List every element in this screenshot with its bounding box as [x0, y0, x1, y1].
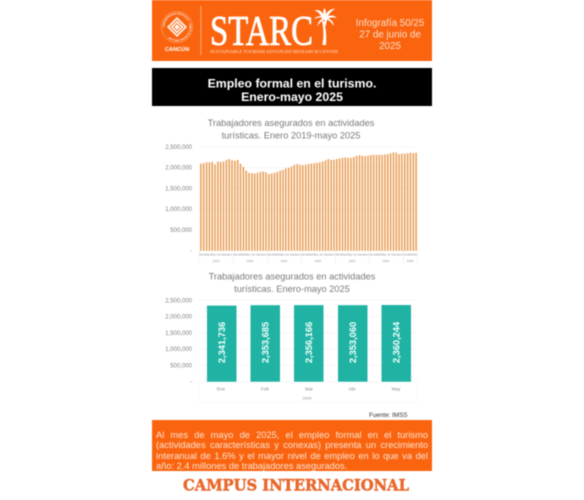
chart title 2: turísticas. Enero-mayo 2025	[234, 284, 350, 294]
x axis months and years 1: 2023	[349, 259, 356, 263]
infographic number and date	[356, 18, 425, 52]
y axis labels 1: 500,000	[170, 228, 193, 234]
chart title 1: turísticas. Enero 2019-mayo 2025	[222, 130, 360, 140]
bars with values: 2,356,166	[304, 322, 314, 363]
y axis labels 2: 2,000,000	[165, 315, 193, 321]
chart title 2	[209, 272, 376, 294]
line-bar chart: enero 2019-mayo 2025	[165, 118, 418, 264]
y axis labels 1	[165, 145, 193, 255]
title banner	[152, 68, 432, 106]
logo: university seal: UNIVERSIDAD ANÁHUAC · VINCE IN BONO MALUM ·	[162, 12, 192, 42]
summary text: Al mes de mayo de 2025, el empleo formal en el turismo	[156, 430, 428, 440]
x axis months and years 1: EneMarMay Jul Septiem	[370, 252, 404, 256]
chart title 1	[208, 118, 375, 140]
bars with values: 2,353,685	[260, 322, 270, 363]
summary text: interanual de 1.6% y el mayor nivel de empleo en lo que va del	[156, 451, 428, 461]
x axis months and years 1: 2021	[281, 259, 288, 263]
chart title 2: Trabajadores asegurados en actividades	[209, 272, 376, 282]
icon: palm tree	[314, 8, 336, 45]
x axis labels 2: Mar	[305, 386, 313, 392]
x axis labels 2: Ene	[217, 386, 226, 392]
x axis months and years 1: EneMarMay	[404, 252, 418, 256]
infographic number and date: 27 de junio de	[359, 30, 421, 40]
chart title 1: Trabajadores asegurados en actividades	[208, 118, 375, 128]
x axis labels 2: Feb	[261, 386, 269, 392]
bars with values: 2,353,060	[348, 322, 358, 363]
x axis months and years 1: 2020	[247, 259, 254, 263]
x axis months and years 1: EneMarMay Jul Septiem	[336, 252, 370, 256]
x axis labels 2	[199, 382, 417, 402]
x axis months and years 1: 2022	[315, 259, 322, 263]
bar chart: enero-mayo 2025	[165, 272, 417, 402]
summary text: año: 2.4 millones de trabajadores asegurados.	[156, 461, 347, 471]
infographic number and date: Infografía 50/25	[356, 18, 425, 29]
bars with values	[207, 305, 411, 382]
bars with values: 2,360,244	[392, 321, 402, 363]
y axis labels 2: 1,000,000	[165, 347, 193, 353]
y axis labels 1: 2,500,000	[165, 145, 193, 151]
y axis labels 1: 1,500,000	[165, 186, 193, 192]
campus heading: CAMPUS INTERNACIONAL	[183, 476, 409, 494]
monthly bars	[201, 152, 416, 251]
logo: university seal: CANCÚN	[165, 46, 189, 53]
x axis months and years 1: 2024	[383, 259, 390, 263]
tagline: SUSTAINABLE TOURISM ADVANCED RESEARCH CENTER	[210, 49, 339, 54]
y axis labels 2	[165, 298, 193, 386]
logo: STARC wordmark: STARC	[210, 9, 313, 55]
logo: university seal	[160, 10, 194, 53]
bars with values: 2,341,736	[217, 322, 227, 363]
summary text	[156, 430, 428, 472]
y axis labels 2: 500,000	[170, 363, 193, 369]
summary panel background	[152, 420, 432, 471]
infographic number and date: 2025	[379, 41, 401, 52]
x axis months and years 1: 2019	[213, 259, 220, 263]
title banner: Enero-mayo 2025	[241, 90, 343, 104]
y axis labels 1: 2,000,000	[165, 166, 193, 172]
x axis months and years 1	[199, 251, 418, 264]
y axis labels 1: -	[190, 249, 192, 255]
header banner	[151, 0, 433, 62]
title banner: Empleo formal en el turismo.	[208, 76, 376, 90]
x axis labels 2: May	[392, 386, 401, 392]
y axis labels 2: 1,500,000	[165, 331, 193, 337]
x axis labels 2: Abr	[348, 386, 356, 392]
y axis labels 2: -	[190, 380, 192, 386]
x axis months and years 1: EneMarMay Jul Septiem	[268, 252, 302, 256]
summary text: (actividades características y conexas) presenta un crecimiento	[156, 440, 428, 450]
source note: Fuente: IMSS	[369, 412, 408, 419]
y axis labels 1: 1,000,000	[165, 207, 193, 213]
x axis months and years 1: EneMarMay Jul Septiem	[200, 252, 233, 256]
x axis months and years 1: EneMarMay Jul Septiem	[234, 252, 268, 256]
y axis labels 2: 2,500,000	[165, 298, 193, 304]
x axis labels 2: 2025	[303, 396, 312, 400]
x axis months and years 1: EneMarMay Jul Septiem	[302, 252, 336, 256]
x axis months and years 1: 2025	[407, 259, 414, 263]
